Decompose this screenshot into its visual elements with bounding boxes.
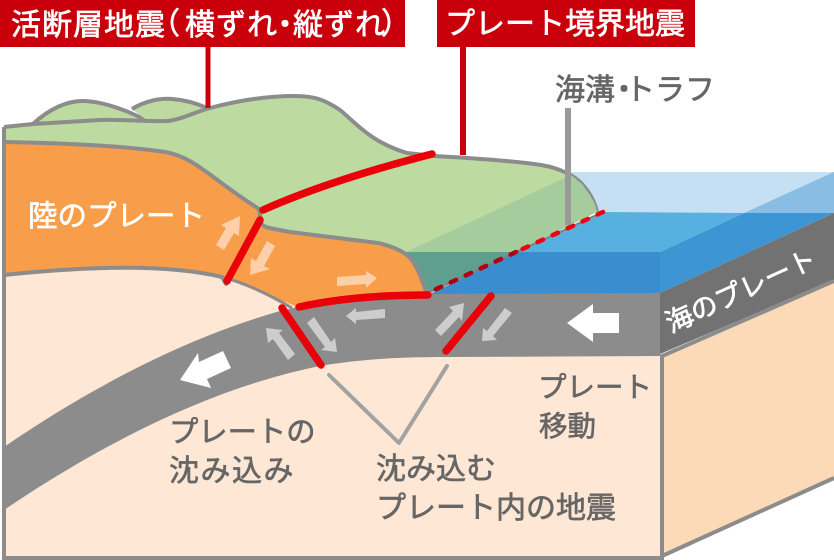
panel: land surface (4, 96, 597, 292)
label: trench and trough: トラフ (625, 74, 715, 107)
label: land plate: 陸のプレート (28, 200, 205, 233)
callout: V leader for intraplate earthquakes (329, 366, 447, 443)
label: active fault earthquake: ） (381, 8, 411, 41)
label: plate subduction: 沈み込み (169, 455, 295, 488)
callout: red leader active fault (206, 46, 210, 108)
fault lines (227, 154, 491, 365)
label: active fault earthquake (0, 0, 411, 47)
panel: sea water (430, 172, 834, 294)
panel: land plate right block (222, 223, 427, 307)
label: active fault earthquake: ・ (270, 9, 300, 42)
label: trench and trough: ・ (609, 74, 639, 107)
sea plate boundary dashed trench line (430, 212, 603, 292)
icon: white arrow subduction (180, 351, 231, 388)
label: ocean plate: 海のプレート (661, 244, 821, 338)
label: trench and trough: 海溝 (555, 74, 615, 107)
label: plate subduction: プレートの (169, 416, 315, 449)
icon: white arrow plate movement (567, 304, 619, 342)
label: plate boundary earthquake: プレート境界地震 (445, 8, 685, 41)
panel: land plate left block (4, 142, 261, 284)
label: active fault earthquake: （ (150, 8, 180, 41)
label: plate movement: プレート (538, 372, 652, 404)
outline: block frame (4, 127, 834, 558)
panel: right crust face (662, 282, 834, 554)
panel: front crust face (4, 270, 664, 558)
panel: subducting ocean plate (4, 293, 660, 510)
label: active fault earthquake: 活断層地震 (11, 9, 166, 42)
label: plate boundary earthquake (437, 0, 695, 47)
icons: land plate slip arrows (216, 216, 377, 288)
label: active fault earthquake: 縦ずれ (293, 9, 386, 42)
icons: ocean plate slip arrows (266, 303, 512, 360)
label: plate movement: 移動 (539, 411, 596, 443)
label: intraplate earthquake: プレート内の地震 (376, 492, 616, 525)
label: active fault earthquake: 横ずれ (185, 9, 278, 42)
label: intraplate earthquake: 沈み込む (376, 453, 496, 486)
panel: ocean plate right face (660, 213, 834, 354)
callout: red leader plate boundary (460, 46, 466, 155)
callout: trench leader (565, 108, 571, 225)
